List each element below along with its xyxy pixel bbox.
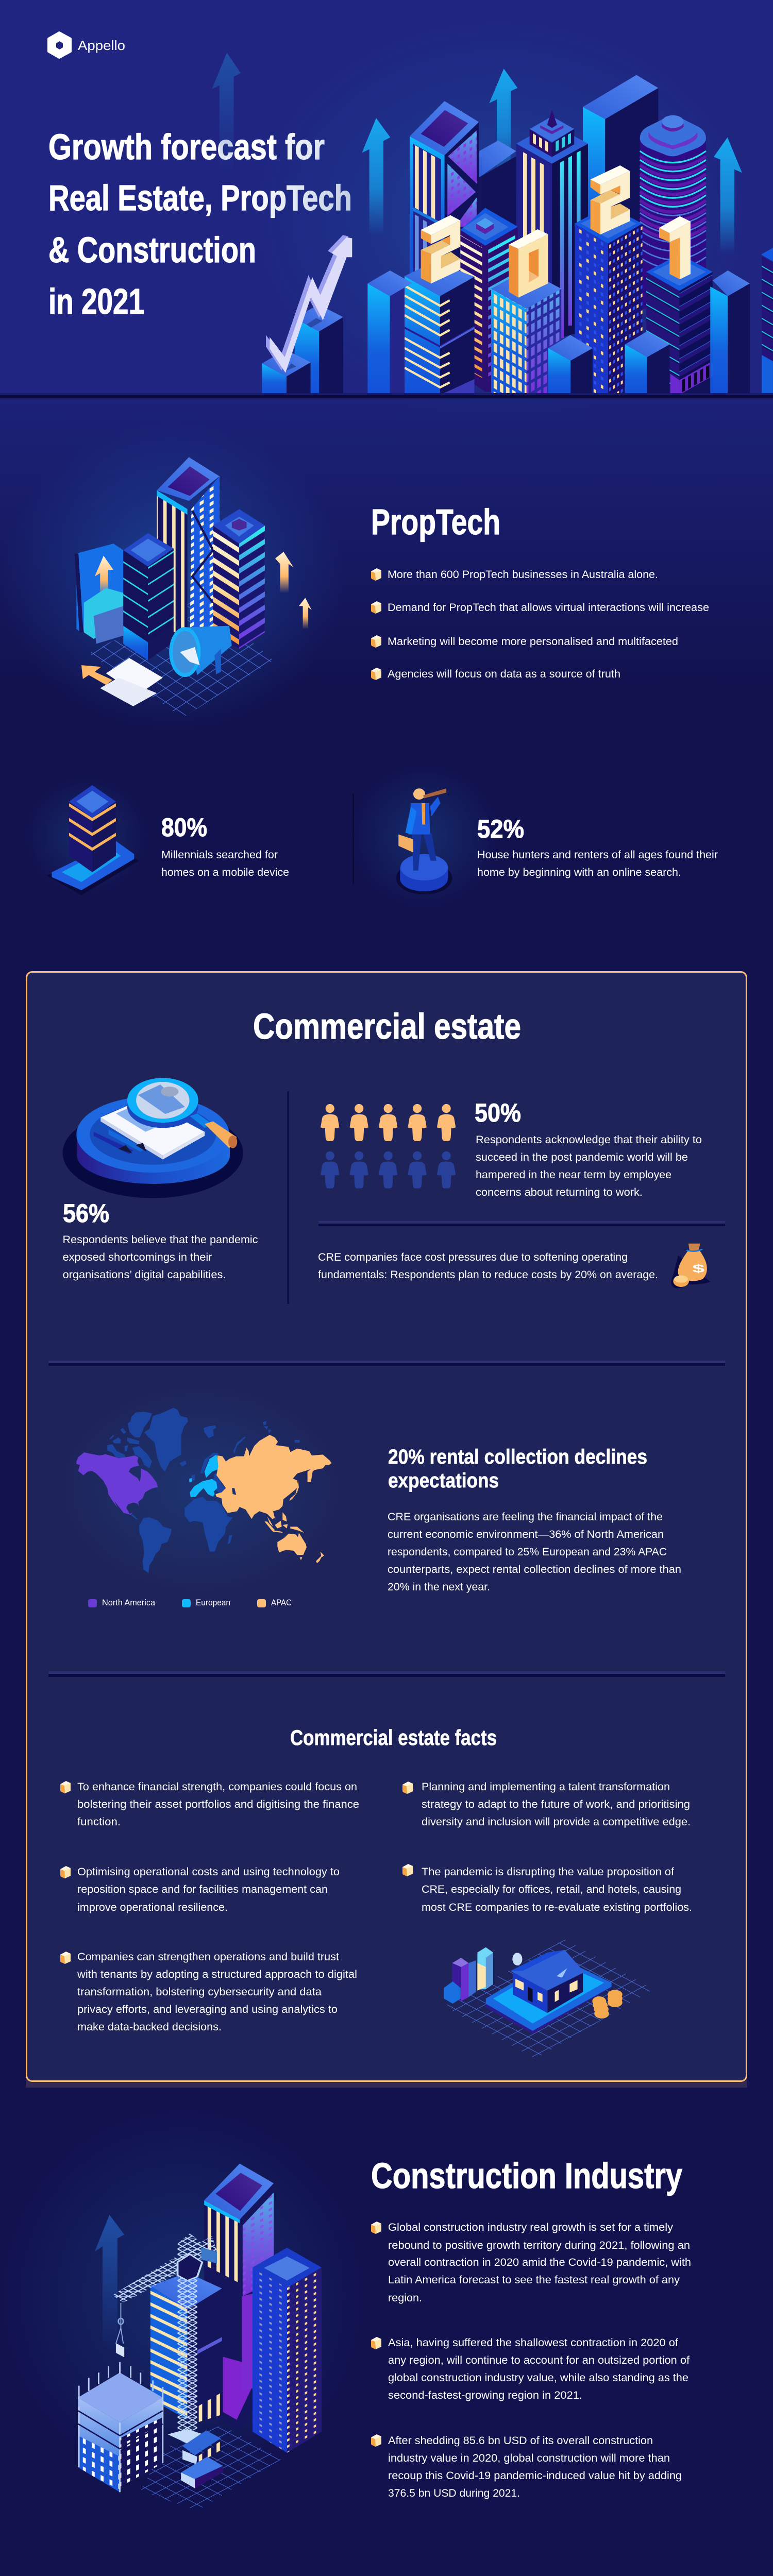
- legend: APAC: [271, 1598, 292, 1607]
- bullet: asia: global construction industry value, while also standing as the: [388, 2372, 688, 2384]
- stat: 80%: Millennials searched for: [161, 849, 278, 861]
- world map section: [50, 1377, 681, 1607]
- fact 5: privacy efforts, and leveraging and using analytics to: [77, 2004, 338, 2015]
- illustration: PropTech city: [0, 422, 345, 731]
- fact 5: with tenants by adopting a structured approach to digital: [77, 1969, 357, 1980]
- text: rental declines: current economic environment—36% of North American: [388, 1529, 664, 1540]
- text: rental declines: [388, 1511, 681, 1593]
- bullet: asia: [371, 2337, 690, 2401]
- stat: 56%: 56%: [63, 1199, 109, 1228]
- stat: 80%: [25, 777, 289, 895]
- fact 5: make data-backed decisions.: [77, 2021, 222, 2033]
- heading: commercial estate facts: Commercial estate facts: [290, 1725, 497, 1750]
- hero title: [48, 127, 352, 321]
- icon: magnifier over reports: [63, 1078, 243, 1198]
- stat: 52%: home by beginning with an online search.: [477, 867, 681, 878]
- site cabin: [181, 2430, 223, 2488]
- side towers: [262, 270, 412, 395]
- stat: 50%: succeed in the post pandemic world will be: [476, 1151, 688, 1163]
- fact 1: function.: [77, 1816, 121, 1828]
- striped front tower: [405, 261, 475, 395]
- bullet list: More than 600 PropTech businesses in Australia alone.: [388, 569, 658, 581]
- striped small tower: [460, 208, 518, 392]
- bullet: global growth: [371, 2222, 691, 2304]
- open-top tower: [410, 101, 479, 273]
- panel: commercial estate: [26, 972, 747, 2088]
- bullet: global growth: Latin America forecast to see the fastest real growth of any: [388, 2274, 680, 2286]
- heading: construction industry: Construction Industry: [371, 2156, 682, 2196]
- stat: 50%: 50%: [475, 1098, 521, 1127]
- stat: 50%: [321, 1098, 702, 1198]
- map: rental decline regions: [50, 1377, 352, 1601]
- bullet list: [371, 568, 709, 680]
- legend: North America: [102, 1598, 156, 1607]
- text: rental declines: 20% in the next year.: [388, 1581, 490, 1593]
- left towers: [262, 101, 518, 395]
- fact 2: diversity and inclusion will provide a competitive edge.: [422, 1816, 691, 1828]
- brand logo: [48, 32, 125, 58]
- digit 2: [421, 215, 460, 283]
- stat: 56%: exposed shortcomings in their: [63, 1251, 212, 1263]
- europe: [189, 1454, 218, 1497]
- stat: 56%: Respondents believe that the pandemic: [63, 1234, 258, 1246]
- hero title: in 2021: [48, 281, 144, 321]
- cylindrical tower: [640, 115, 706, 309]
- zigzag chart arrow: [266, 235, 352, 373]
- fact 1: To enhance financial strength, companies could focus on: [77, 1781, 357, 1793]
- bullet: global growth: region.: [388, 2292, 422, 2304]
- bullet: recovery value: 376.5 bn USD during 2021.: [388, 2487, 520, 2499]
- bullet list: Agencies will focus on data as a source of truth: [388, 668, 620, 680]
- megaphone: [169, 626, 232, 677]
- fact 5: Companies can strengthen operations and build trust: [77, 1951, 339, 1963]
- hero ground line: [0, 393, 773, 398]
- stat: 50%: Respondents acknowledge that their ability to: [476, 1134, 702, 1146]
- icon: money bag: $: [693, 1262, 704, 1275]
- windowed tower: [491, 270, 561, 395]
- bullet: recovery value: recoup this Covid-19 pandemic-induced value hit by adding: [388, 2470, 682, 2482]
- stat: 50%: hampered in the near term by employee: [476, 1169, 671, 1181]
- section: construction industry: [0, 2107, 691, 2511]
- bullet: global growth: overall contraction in 2020 amid the Covid-19 pandemic, with: [388, 2257, 691, 2268]
- stat: 52%: 52%: [477, 815, 524, 843]
- stat: 50%: concerns about returning to work.: [476, 1187, 643, 1198]
- heading: rental declines: 20% rental collection declines: [388, 1446, 647, 1468]
- central tower: [516, 110, 588, 340]
- illustration: house on phone: [444, 1939, 653, 2059]
- bullet: global growth: rebound to positive growth territory during 2021, following an: [388, 2240, 690, 2251]
- bullet: global growth: Global construction industry real growth is set for a timely: [388, 2222, 674, 2233]
- stat: 80%: homes on a mobile device: [161, 867, 289, 878]
- text: rental declines: counterparts, expect rental collection declines of more than: [388, 1564, 681, 1575]
- icon: businessman with telescope: [350, 764, 498, 908]
- callout: cost pressures: CRE companies face cost pressures due to softening operating: [318, 1251, 628, 1263]
- hero header: [0, 10, 773, 422]
- stepped tower: [646, 254, 713, 395]
- bullet: recovery value: industry value in 2020, global construction will more than: [388, 2452, 670, 2464]
- crane: [112, 2233, 217, 2444]
- heading: PropTech: PropTech: [371, 502, 500, 542]
- fact 2: Planning and implementing a talent transformation: [422, 1781, 670, 1793]
- stat: 80%: 80%: [161, 813, 207, 842]
- dotted tower: [575, 206, 643, 395]
- callout: cost pressures: [318, 1244, 710, 1289]
- bullet list: Demand for PropTech that allows virtual interactions will increase: [388, 602, 709, 614]
- fact 4: CRE, especially for offices, retail, and hotels, causing: [422, 1884, 681, 1895]
- fact 4: most CRE companies to re-evaluate existing portfolios.: [422, 1902, 692, 1913]
- hero title: & Construction: [48, 230, 256, 270]
- front towers: [491, 165, 773, 395]
- north america: [76, 1452, 158, 1515]
- fact 4: The pandemic is disrupting the value proposition of: [422, 1866, 674, 1878]
- heading: commercial estate: Commercial estate: [253, 1006, 521, 1046]
- stat: 56%: organisations’ digital capabilities.: [63, 1269, 226, 1281]
- fact 5: [60, 1951, 357, 2033]
- arrows: [275, 552, 312, 629]
- building under construction: [78, 2362, 163, 2492]
- bullet: asia: any region, will continue to account for an outsized portion of: [388, 2354, 690, 2366]
- fact 5: transformation, bolstering cybersecurity and data: [77, 1986, 322, 1998]
- fact 1: bolstering their asset portfolios and digitising the finance: [77, 1799, 359, 1810]
- background growth arrows: [212, 53, 742, 254]
- other continents: [107, 1408, 300, 1573]
- fact 3: Optimising operational costs and using technology to: [77, 1866, 340, 1878]
- bullet list: Marketing will become more personalised and multifaceted: [388, 636, 678, 648]
- hero title: Real Estate, PropTech: [48, 178, 352, 218]
- stat: 52%: [350, 764, 718, 908]
- asia pacific: [215, 1435, 331, 1563]
- legend: European: [196, 1598, 230, 1607]
- fact 2: strategy to adapt to the future of work, and prioritising: [422, 1799, 690, 1810]
- stat: 52%: House hunters and renters of all ages found their: [477, 849, 718, 861]
- hero title: Growth forecast for: [48, 127, 325, 167]
- brand logo: Appello: [78, 38, 125, 53]
- icon: people pictogram: [321, 1104, 456, 1189]
- fact 4: [402, 1864, 692, 1913]
- fact 2: [402, 1781, 691, 1828]
- fact 3: improve operational resilience.: [77, 1902, 228, 1913]
- fact 3: reposition space and for facilities management can: [77, 1884, 328, 1895]
- icon: tower on phone: [25, 777, 148, 895]
- heading: rental declines: expectations: [388, 1469, 499, 1492]
- stat: 56%: [63, 1078, 258, 1281]
- bullet: asia: second-fastest-growing region in 2021.: [388, 2389, 582, 2401]
- bullet: recovery value: [371, 2434, 682, 2499]
- text: rental declines: respondents, compared to 25% European and 23% APAC: [388, 1546, 667, 1558]
- section: PropTech: [0, 422, 718, 908]
- heading: rental declines: [388, 1446, 647, 1492]
- fact 3: [60, 1866, 340, 1913]
- papers: [81, 658, 163, 706]
- bullet: asia: Asia, having suffered the shallowest contraction in 2020 of: [388, 2337, 678, 2349]
- illustration: construction site: [0, 2107, 365, 2511]
- callout: cost pressures: fundamentals: Respondents plan to reduce costs by 20% on average.: [318, 1269, 658, 1281]
- icon: money bag: [671, 1244, 710, 1289]
- hero city glow: [242, 10, 758, 422]
- bullet: recovery value: After shedding 85.6 bn USD of its overall construction: [388, 2435, 653, 2447]
- fact 1: [60, 1781, 359, 1828]
- text: rental declines: CRE organisations are feeling the financial impact of the: [388, 1511, 663, 1523]
- front blocks: [548, 248, 773, 395]
- back towers: [516, 75, 706, 340]
- digits 0 2 1: [509, 165, 691, 298]
- legend: [88, 1598, 292, 1607]
